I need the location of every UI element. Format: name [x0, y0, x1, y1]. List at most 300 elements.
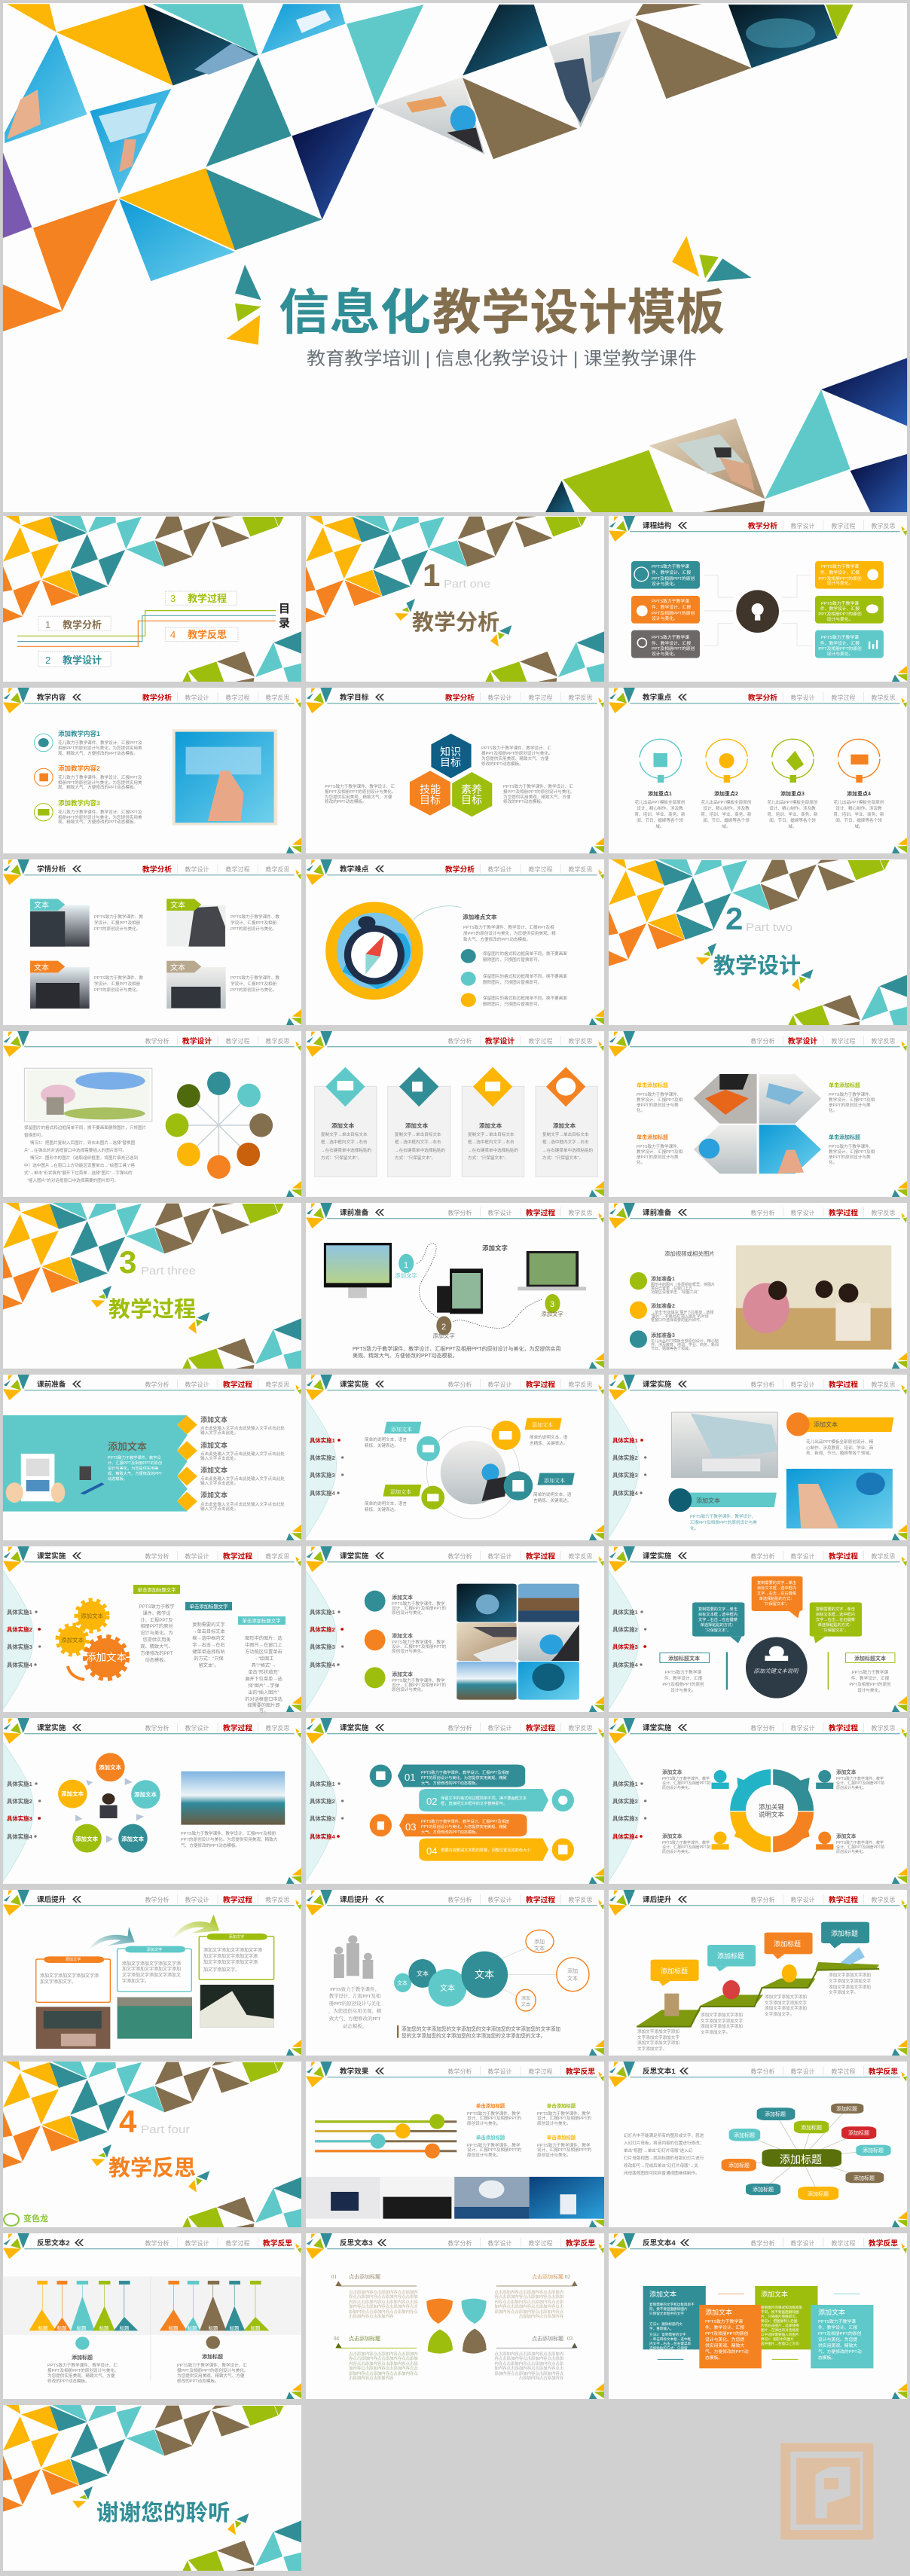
- results text: 设计、汇报PPT及相册PPT的: [467, 2115, 522, 2121]
- card text: 加文字添加文字添加文字添: [203, 1953, 258, 1959]
- panel: cards with arrows slide: 教学反思: [265, 1896, 289, 1903]
- panel: gears slide: 教学设计: [185, 1552, 209, 1560]
- panel: devices path slide: [306, 1203, 604, 1369]
- hero triangle mosaic: [3, 4, 907, 512]
- card text: 框→选中框内文字→右击: [542, 1139, 589, 1145]
- panel: person cycle slide: 具体实施2: [7, 1798, 32, 1805]
- headings and dense text: 内容点击添加内容点击添加内容点击添: [494, 2361, 564, 2367]
- panel: reflection text 3 slide: 教学分析: [447, 2239, 472, 2247]
- bubble labels: 添加: [567, 1967, 578, 1974]
- mind map labels and text: 添加标题: [863, 2147, 884, 2153]
- structure box text: 件、教学设计、汇报: [820, 569, 860, 575]
- pill text: PPTS致力于教学课件、教学设计、汇报PPT及相册: [421, 1769, 509, 1775]
- headings and dense text: 点击添加内容点击添加内容点击添加内: [494, 2351, 564, 2357]
- headings and dense text: 添加内容点击添加内容点击添加内容点: [494, 2309, 564, 2315]
- pill text: 01: [405, 1772, 415, 1783]
- panel: reflection text 2 slide: [3, 2233, 301, 2399]
- gear labels and tags: 观、精致大气、: [140, 1644, 173, 1650]
- item text: 添加视频或相关图片: [664, 1250, 715, 1257]
- panel: reflection text 4 slide: 教学设计: [791, 2239, 815, 2247]
- panel: devices path slide: 课前准备: [340, 1208, 369, 1217]
- panel: teaching content slide: 教学设计: [185, 694, 209, 701]
- stairs text: 文字添加文字添加文字: [637, 2034, 679, 2040]
- panel: classroom implementation photos slide: 具体实施3: [612, 1472, 638, 1479]
- headings and dense text: 点击添加内容点击添加内容点击添加内: [349, 2351, 418, 2357]
- bubble text: 添加标题文本: [854, 1655, 886, 1662]
- bubble labels: [328, 1938, 578, 2039]
- panel: video and study photo slide: 教学分析: [750, 1209, 774, 1216]
- orbit labels: 言精炼、关键表达。: [530, 1440, 567, 1446]
- panel: donut chart slide: 课堂实施: [643, 1723, 672, 1732]
- collage captions: PPTS致力于教学课件、: [637, 1143, 681, 1149]
- panel: four diamond cards slide: [306, 1031, 604, 1197]
- panel: gears slide: [3, 1546, 301, 1714]
- mountain labels and text: 为您提供实用美观、精致大气、方便: [177, 2373, 245, 2379]
- headings and dense text: 容点击添加内容点击添加内容点击添加: [349, 2355, 418, 2361]
- box text: 方法2：复制需要的文字: [649, 2332, 686, 2337]
- headings and dense text: 内容点击添加内容点击添加内容点击添: [349, 2361, 418, 2367]
- panel: teaching difficulties slide: 教学分析: [445, 865, 475, 874]
- key point text: 添加重点3: [780, 790, 805, 797]
- key point text: 育、培训、学业、商务、新: [701, 811, 752, 817]
- stairs text: 文字添加文字添加文字: [701, 2018, 743, 2024]
- results text: 单击添加标题: [547, 2134, 576, 2141]
- route labels: [353, 1244, 563, 1359]
- gear labels and tags: 添加文本: [61, 1636, 84, 1644]
- difficulty text: 册PPT的原创设计与美化，为您提供实用美观、精: [463, 930, 556, 936]
- bubble text: 添加关键文本说明: [753, 1668, 799, 1674]
- orbit labels: [365, 1421, 572, 1512]
- mountain labels and text: 报PPT及相册PPT的原创设计与美化。: [177, 2367, 248, 2373]
- collage captions: 册PPT的原创设计与美: [829, 1154, 871, 1160]
- headings and dense text: 击添加内容点击添加内容: [519, 2375, 564, 2381]
- contents items: 3: [170, 593, 176, 604]
- goal descriptions: 修改的PPT动态模板。: [503, 798, 545, 804]
- donut labels: 设计、汇报PPT及相册PPT的: [662, 1781, 710, 1786]
- bubble labels: 添加您的文字添加您的文字添加您的文字添加您的文字添加您的文字添加: [402, 2025, 560, 2032]
- results text: 设计、汇报PPT及相册PPT的: [537, 2147, 592, 2153]
- panel: student analysis slide: 学情分析: [37, 865, 66, 874]
- mountain labels and text: 标题: [57, 2324, 67, 2331]
- photo strip: [306, 2177, 604, 2219]
- mind map labels and text: [624, 2105, 884, 2197]
- stairs text: 添加标题: [774, 1940, 801, 1948]
- gear labels and tags: 计、汇报PPT及: [141, 1617, 173, 1623]
- mind map labels and text: 添加标题: [848, 2129, 869, 2136]
- bubble labels: 文本: [534, 1945, 545, 1952]
- box text: 气、方便修改的PPT动: [705, 2349, 749, 2355]
- panel: teaching key points slide: 教学反思: [871, 694, 895, 701]
- mind map labels and text: 修改即可→完成后单击“幻灯片母版”→关: [624, 2162, 698, 2169]
- bubble text: PPT及相册PPT的原创: [662, 1681, 704, 1687]
- bubble text: [662, 1579, 891, 1693]
- box text: 图片→在弹出的对话框窗: [761, 2327, 799, 2333]
- card text: 方式：“只保留文本”。: [542, 1155, 583, 1161]
- gear labels and tags: [61, 1585, 286, 1714]
- panel: classroom implementation circle slide: 教学过程: [526, 1380, 555, 1389]
- structure box text: [652, 563, 862, 657]
- key point text: 育、培训、学业、商务、新: [634, 811, 686, 817]
- section number: 1: [423, 557, 440, 593]
- panel: speech bubbles slide: 教学设计: [791, 1552, 815, 1560]
- box text: 设计与美化。为您提: [818, 2336, 857, 2343]
- panel: donut chart slide: 具体实施1: [612, 1781, 638, 1787]
- card text: [40, 1934, 262, 1985]
- painting caption text: 片”→在弹出的对话框窗口中选择需要插入的图片即可。: [24, 1147, 127, 1153]
- donut labels: 设计、汇报PPT及相册PPT的: [836, 1845, 884, 1850]
- banner text: 心制作。涉及教育、培训、学业、商: [806, 1445, 874, 1451]
- bubble text: 件、教学设计、汇报: [851, 1675, 890, 1681]
- banner text: [690, 1421, 874, 1531]
- donut labels: PPTS致力于教学课件、教学: [836, 1776, 884, 1781]
- contents vertical heading: [279, 603, 290, 630]
- stairs text: 文字添加文字添加文字: [765, 2000, 807, 2006]
- panel: reflection text 1 slide: 教学分析: [750, 2068, 774, 2075]
- box text: 态模板。: [818, 2355, 835, 2361]
- orbit labels: 精炼、关键表达。: [365, 1506, 399, 1512]
- structure box text: 设计与美化。: [652, 581, 678, 587]
- mind map labels and text: 灯片母版视图→找到标题的母版幻灯片进行: [624, 2155, 704, 2161]
- panel: teaching key points slide: [609, 688, 907, 853]
- gear labels and tags: 单击添加标题文字: [189, 1603, 228, 1610]
- card text: 添加文本: [479, 1122, 502, 1129]
- panel: hexagon photo collage slide: 教学分析: [750, 1037, 774, 1045]
- panel: bubbles and people slide: 教学过程: [526, 1895, 555, 1904]
- stairs text: 添加标题: [717, 1952, 744, 1960]
- card text: →在右键菜单中选择粘贴的: [542, 1147, 594, 1153]
- results text: PPTS致力于教学课件、教学: [467, 2142, 521, 2148]
- structure box text: 设计与美化。: [652, 651, 678, 657]
- tag labels and text: PPTS致力于教学课件、教: [231, 975, 279, 981]
- pills: [370, 1765, 574, 1861]
- banner text: 添加文本: [200, 1466, 228, 1474]
- donut labels: 添加关键: [759, 1803, 784, 1811]
- key point text: 设计、精心制作。涉及教: [835, 805, 882, 811]
- panel: teal banner document slide: 课前准备: [37, 1380, 66, 1389]
- difficulty text: 保留图片的格式和边框简单不同，换不要画面: [483, 973, 567, 979]
- mountain labels and text: 为您提供实用美观、精致大气、方便: [47, 2373, 115, 2379]
- panel: donut chart slide: 具体实施2: [612, 1798, 638, 1805]
- bubble text: 件、教学设计、汇报: [664, 1675, 703, 1681]
- item text: →单击“形状填充”展开下拉菜单→选择: [651, 1310, 713, 1315]
- item text: 填充已置单→在窗口上方: [651, 1286, 692, 1291]
- key point text: 花儿出品PPT模板全部原创: [834, 799, 884, 805]
- panel: reflection text 2 slide: 教学反思: [263, 2239, 292, 2248]
- panel: speech bubbles slide: 具体实施4: [612, 1662, 639, 1668]
- list text: 原创设计与美化。: [392, 1686, 426, 1692]
- contents items: 教学过程: [188, 593, 227, 604]
- panel: numbered pills slide: 教学反思: [568, 1724, 592, 1732]
- mind map labels and text: 添加标题: [854, 2175, 875, 2181]
- gear labels and tags: 单击添加标题文字: [242, 1617, 281, 1624]
- panel: section 4 title slide: [3, 2062, 301, 2227]
- stairs text: 文字添加文字。: [701, 2029, 730, 2035]
- painting caption text: 情况1：把图片复制入后图片，到右击图片→选择“替换图: [30, 1140, 136, 1146]
- watercolor picture and radial icon chart: [24, 1068, 273, 1179]
- colored boxes and arrows: [643, 2286, 873, 2368]
- box text: 复制需要的文字和边框简单不: [649, 2302, 695, 2307]
- box text: 添加文本: [818, 2308, 845, 2316]
- gear labels and tags: 择“图片”→字弹: [248, 1683, 279, 1689]
- contents items: 1: [45, 619, 50, 630]
- headings and dense text: 加内容点击添加内容点击添加内容点击: [494, 2365, 564, 2371]
- panel: section 2 title slide: [609, 859, 907, 1025]
- contents items: [45, 593, 227, 666]
- goal descriptions: 报PPT及相册PPT的原创设计与美化。: [503, 789, 574, 795]
- panel: classroom implementation photos slide: 具体实施4: [612, 1490, 639, 1497]
- banner text: 添加文本: [696, 1497, 720, 1504]
- card text: 添加文字添加文字添加文字添: [203, 1947, 262, 1953]
- mind map labels and text: 添加标题: [801, 2124, 822, 2131]
- panel: donut chart slide: 具体实施4: [612, 1833, 639, 1840]
- panel: reflection text 2 slide: 教学设计: [185, 2239, 209, 2247]
- panel: course structure slide: 教学反思: [871, 522, 895, 530]
- stairs text: 添加标题: [661, 1967, 688, 1975]
- results text: PPTS致力于教学课件、教学: [537, 2111, 591, 2117]
- painting caption text: 替换即可。: [24, 1132, 45, 1138]
- mind map labels and text: 添加标题: [780, 2153, 822, 2165]
- goal descriptions: PPTS致力于教学课件、教学设计、汇: [481, 745, 551, 751]
- panel: four diamond cards slide: 教学过程: [529, 1037, 553, 1045]
- bubble text: 目标文本框→选中框内: [816, 1611, 855, 1617]
- collage captions: 单击添加标题: [829, 1082, 860, 1088]
- panel: gears slide: 具体实施4: [7, 1662, 33, 1668]
- panel: icon list and photo grid slide: 教学反思: [568, 1552, 592, 1560]
- panel: donut chart slide: 教学分析: [750, 1724, 774, 1732]
- section heading: 教学反思: [108, 2156, 196, 2181]
- panel: classroom implementation circle slide: 课堂实施: [340, 1380, 369, 1389]
- orbit labels: 简单的说明文本，语言: [365, 1436, 407, 1442]
- gear labels and tags: 图形中的图片：选: [245, 1635, 282, 1641]
- panel: icon list and photo grid slide: 教学分析: [447, 1552, 472, 1560]
- bubble text: 单选择粘贴的方式：: [818, 1622, 853, 1628]
- panel: person cycle slide: 具体实施4: [7, 1833, 33, 1840]
- tag labels and text: [34, 900, 279, 993]
- gear labels and tags: 添加文本: [81, 1612, 103, 1619]
- panel: teaching difficulties slide: 教学反思: [568, 865, 592, 873]
- gear labels and tags: 中图片→在窗口上: [245, 1642, 282, 1648]
- headings and dense text: 点击添加内容点击添加内容点击添加内: [494, 2289, 564, 2295]
- key point text: 闻、节日、婚嫁等各个领: [637, 817, 683, 823]
- stairs text: 添加文字添加文字添加: [701, 2023, 743, 2029]
- box text: [649, 2290, 862, 2361]
- panel: person cycle slide: 课堂实施: [37, 1723, 66, 1732]
- panel: gears slide: 具体实施3: [7, 1644, 32, 1650]
- item text: [651, 1250, 719, 1351]
- hexagon photos: [694, 1074, 821, 1174]
- banner text: 花儿出品PPT模板全部原创设计、精: [806, 1439, 874, 1445]
- panel: classroom implementation circle slide: 教学分析: [447, 1381, 472, 1388]
- banner text: PPTS致力于教学课件、教学设计、: [690, 1513, 756, 1519]
- panel: reflection text 3 slide: 反思文本3: [340, 2239, 373, 2248]
- goal labels: 目标: [461, 794, 482, 806]
- panel: teaching content slide: 教学分析: [142, 693, 172, 702]
- teal band with document illustration: [3, 1415, 197, 1512]
- donut labels: 设计、汇报PPT及相册PPT的: [836, 1781, 884, 1786]
- painting caption text: “插入图片”的对话框窗口中选择需要的图片即可。: [27, 1177, 118, 1183]
- box text: PPT及相册PPT的原创: [705, 2330, 749, 2336]
- headings and dense text: 点击添加标题: [349, 2335, 380, 2342]
- panel: classroom implementation circle slide: 教学反思: [568, 1381, 592, 1388]
- pill text: 大气、方便修改的PPT动态模板。: [421, 1780, 480, 1786]
- tag labels and text: PPT的原创设计与美化。: [94, 987, 140, 993]
- card text: 添加文字添加文字添加文字添: [40, 1973, 99, 1979]
- goal labels: 目标: [440, 756, 461, 768]
- headings and dense text: 01: [331, 2274, 337, 2280]
- box text: 情况1：把图复制入后图: [761, 2318, 798, 2324]
- gears: [57, 1600, 127, 1680]
- banner text: 动态模板。: [108, 1476, 127, 1482]
- key point text: 闻、节日、婚嫁等各个领: [835, 817, 882, 823]
- gear labels and tags: 的方式：“只保: [194, 1656, 224, 1662]
- structure box text: PPTS致力于教学课: [652, 598, 689, 604]
- panel: classroom implementation photos slide: 教学分析: [750, 1381, 774, 1388]
- structure box text: PPTS致力于教学课: [821, 634, 859, 640]
- headings and dense text: [331, 2273, 573, 2381]
- panel: icon list and photo grid slide: 课堂实施: [340, 1552, 369, 1561]
- key point text: 域。: [655, 823, 664, 829]
- results text: 原创设计与美化。: [467, 2152, 501, 2158]
- card text: 方式：“只保留文本”。: [321, 1155, 362, 1161]
- box text: 同，换不要画面删除图片: [649, 2306, 688, 2312]
- key point text: 花儿出品PPT模板全部原创: [635, 799, 686, 805]
- goal descriptions: 为您提供实用美观、精致大气、方便: [503, 794, 571, 800]
- banner text: 观、精致大气、方便修改的PPT: [108, 1470, 163, 1476]
- card text: 添加文字: [147, 1946, 162, 1952]
- panel: gears slide: 具体实施1: [7, 1609, 32, 1616]
- box text: 添加文本: [761, 2290, 788, 2298]
- stairs text: 添加文字添加文字添加: [637, 2028, 679, 2034]
- pill text: 04: [426, 1845, 437, 1857]
- difficulty text: 保留图片的格式和边框简单不同，换不要画面: [483, 951, 567, 957]
- mountain labels and text: PPTS致力于教学课件、教学设计、汇: [177, 2362, 247, 2368]
- painting caption text: 中）选中图片→在窗口上方功能区设置单击→“绘图工具”/“格: [24, 1162, 135, 1168]
- mountain labels and text: PPTS致力于教学课件、教学设计、汇: [47, 2362, 118, 2368]
- box text: 口中选择需要插入的图片: [761, 2332, 799, 2337]
- list text: 设计、汇报PPT及相册PPT的: [392, 1644, 447, 1650]
- cycle labels and caption: 添加文本: [75, 1835, 98, 1842]
- content items text: 观、精致大气、方便修改的PPT动态模板。: [58, 819, 138, 825]
- mind map labels and text: 添加标题: [734, 2132, 755, 2138]
- card text: 加文字添加文字添加文字添加: [122, 1966, 181, 1972]
- panel: teaching goals slide: 教学目标: [340, 693, 369, 702]
- section part label: Part four: [141, 2123, 190, 2136]
- panel: teaching key points slide: 教学重点: [643, 693, 672, 702]
- panel: student analysis slide: 教学反思: [265, 865, 289, 873]
- panel: teaching goals slide: 教学反思: [568, 694, 592, 701]
- headings and dense text: 04: [334, 2336, 339, 2342]
- gear labels and tags: 键菜单选择粘贴: [192, 1649, 225, 1655]
- banner text: 汇报PPT及相册PPT的原创设计与美: [690, 1519, 757, 1525]
- section heading: 教学过程: [108, 1297, 196, 1322]
- content items text: 相册PPT的原创设计与美化，为您提供实用美: [58, 814, 142, 820]
- panel: teaching difficulties slide: [306, 859, 604, 1025]
- bubble text: 文字→右击→在右键菜: [757, 1590, 796, 1596]
- box text: PPTS致力于教学课: [818, 2318, 856, 2324]
- banner text: 添加文本: [108, 1441, 147, 1452]
- route labels: 1: [404, 1261, 408, 1270]
- goal descriptions: 为您提供实用美观、精致大气、方便: [481, 755, 549, 762]
- panel: student analysis slide: 教学分析: [142, 865, 172, 874]
- gear labels and tags: 方功能区位置单击: [245, 1649, 282, 1655]
- panel: section 3 title slide: [3, 1203, 301, 1369]
- collage captions: 教学设计、汇报PPT及相: [637, 1149, 683, 1155]
- panel: reflection text 1 slide: 反思文本1: [643, 2067, 676, 2076]
- difficulty text: 添加难点文本: [463, 913, 497, 920]
- content items text: 花儿致力于教学课件、教学设计、汇报PPT及: [58, 740, 142, 746]
- panel: gears slide: 教学反思: [265, 1552, 289, 1560]
- section heading: 教学设计: [713, 954, 801, 978]
- card text: 添加文字: [229, 1934, 244, 1940]
- panel: reflection text 2 slide: 教学分析: [145, 2239, 169, 2247]
- panel: teal banner document slide: 教学分析: [145, 1381, 169, 1388]
- headings and dense text: 击添加内容点击添加内容: [349, 2375, 394, 2381]
- panel: devices path slide: 教学设计: [488, 1209, 512, 1216]
- panel: painting and radial icons slide: 教学反思: [265, 1037, 289, 1045]
- bubble labels: 文本: [417, 1970, 429, 1977]
- gear labels and tags: 设计与美化。为: [140, 1630, 173, 1636]
- structure box text: 设计与美化。: [652, 615, 678, 621]
- panel: course structure slide: 课程结构: [643, 521, 672, 530]
- panel: stairs slide: [609, 1890, 907, 2056]
- key point text: 添加重点2: [714, 790, 738, 797]
- contents vertical heading: 录: [279, 617, 290, 630]
- donut labels: 原创设计与美化。: [836, 1849, 866, 1854]
- panel: reflection text 3 slide: 教学反思: [566, 2239, 595, 2248]
- stairs text: 添加文字添加文字添加: [829, 1972, 871, 1978]
- box text: 内文字→右击→在右键菜单: [649, 2341, 692, 2346]
- structure box text: PPTS致力于教学课: [821, 600, 859, 606]
- cycle chart and photo: [58, 1753, 285, 1853]
- bubble text: PPTS致力于教学课: [665, 1669, 701, 1675]
- panel: course structure slide: 教学设计: [791, 522, 815, 530]
- route labels: 添加文字: [482, 1244, 508, 1252]
- panel: donut chart slide: 具体实施3: [612, 1815, 638, 1822]
- pill text: 03: [405, 1821, 416, 1833]
- panel: reflection text 4 slide: 教学分析: [750, 2239, 774, 2247]
- gear labels and tags: PPTS致力于教学: [139, 1604, 175, 1610]
- panel: person cycle slide: 教学设计: [185, 1724, 209, 1732]
- panel: donut chart slide: [609, 1718, 907, 1884]
- panel: classroom implementation photos slide: 具体实施2: [612, 1454, 638, 1461]
- mountain labels and text: 标题: [99, 2324, 109, 2331]
- gear labels and tags: 课件、教学设: [142, 1610, 171, 1616]
- headings and dense text: 加内容点击添加内容点击添加内容点击: [494, 2303, 564, 2309]
- box text: 添加文本: [705, 2308, 732, 2316]
- card text: 添加文本: [331, 1122, 355, 1129]
- box text: PPTS致力于教学课: [705, 2318, 743, 2324]
- donut labels: [662, 1769, 884, 1854]
- list text: 添加文本: [392, 1594, 413, 1601]
- goal descriptions: PPTS致力于教学课件、教学设计、汇: [503, 783, 573, 789]
- card text: 添加文字: [66, 1956, 81, 1962]
- tag labels and text: 文本: [34, 963, 49, 972]
- box text: 设计与美化。为您提: [705, 2336, 744, 2343]
- box text: 只保留文本框中的文字: [649, 2311, 684, 2316]
- structure box text: PPT及相册PPT的原创: [818, 646, 862, 652]
- route labels: 添加文字: [432, 1332, 455, 1339]
- results text: 单击添加标题: [547, 2102, 576, 2109]
- collage captions: 单击添加标题: [829, 1134, 860, 1140]
- banner text: 输入文字点击此处。: [200, 1455, 238, 1461]
- structure box text: 件、教学设计、汇报: [652, 604, 691, 610]
- logo: 变色龙: [23, 2213, 48, 2223]
- content items text: 添加教学内容1: [58, 730, 100, 737]
- cards and diamonds: [315, 1067, 598, 1177]
- panel: hexagon photo collage slide: 教学反思: [871, 1037, 895, 1045]
- panel: painting and radial icons slide: [3, 1031, 301, 1197]
- panel: teaching results slide: 教学反思: [566, 2067, 595, 2076]
